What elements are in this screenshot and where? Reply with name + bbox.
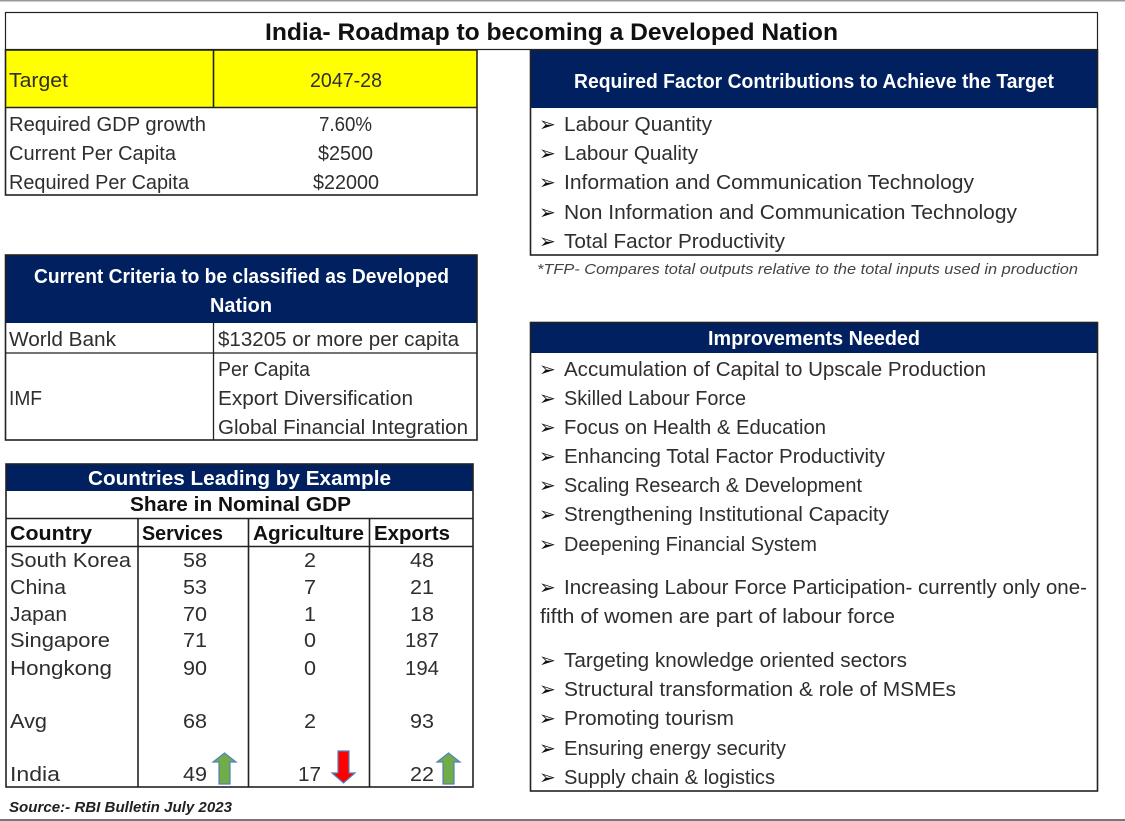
country data rows: 53 [183,577,207,599]
criteria rows: IMF [9,388,42,410]
country data rows: 49 [183,764,207,786]
improvements list: ➢ [539,415,556,439]
improvements list [539,357,1087,789]
criteria rows: Global Financial Integration [218,417,468,439]
icon: exports up arrow [437,753,460,784]
icon: agriculture down arrow [332,751,355,783]
criteria rows: $13205 or more per capita [218,329,460,351]
country data rows: Avg [10,711,47,733]
factor list: ➢ [539,141,556,165]
factor list: Labour Quantity [564,114,712,136]
country data rows: 1 [304,604,316,626]
improvements list: Ensuring energy security [564,738,786,760]
factor list: Labour Quality [564,143,698,165]
improvements list: fifth of women are part of labour force [540,606,895,628]
panel: improvements needed [530,322,1098,791]
country data rows: 70 [183,604,207,626]
criteria heading: Current Criteria to be classified as Developed [34,266,449,288]
improvements list: ➢ [539,736,556,760]
improvements list: ➢ [539,473,556,497]
improvements list: Increasing Labour Force Participation- currently only one- [564,577,1087,599]
factor heading: Required Factor Contributions to Achieve the Target [574,71,1054,93]
country data rows: 7 [304,577,316,599]
target metrics [9,114,379,194]
country data rows: 2 [304,711,316,733]
factor list: Information and Communication Technology [564,172,974,194]
panel: current criteria [6,255,477,440]
improvements list: ➢ [539,386,556,410]
improvements list: ➢ [539,706,556,730]
footnote: TFP definition: *TFP- Compares total outputs relative to the total inputs used in production [537,261,1078,278]
improvements list: Skilled Labour Force [564,388,746,410]
country data rows: China [10,577,67,599]
panel: countries leading by example [6,464,473,787]
factor list: ➢ [539,200,556,224]
improvements list: Accumulation of Capital to Upscale Production [564,359,986,381]
improvements list: Scaling Research & Development [564,475,862,497]
improvements list: ➢ [539,648,556,672]
target metrics: Current Per Capita [9,143,177,165]
improvements list: ➢ [539,765,556,789]
improvements list: ➢ [539,677,556,701]
target metrics: Required GDP growth [9,114,206,136]
country data rows: 18 [410,604,434,626]
target header row: Target [9,70,68,92]
improvements list: ➢ [539,502,556,526]
title [6,12,1098,50]
country data rows: 21 [410,577,434,599]
factor list: ➢ [539,229,556,253]
country data rows: 194 [405,658,439,680]
target header row: 2047-28 [310,70,382,92]
factor list: ➢ [539,170,556,194]
column headers: Country [10,523,93,545]
criteria rows: World Bank [9,329,117,351]
country data rows: 0 [304,658,316,680]
improvements heading: Improvements Needed [708,328,920,350]
criteria heading: Nation [210,295,272,317]
factor list: Total Factor Productivity [564,231,785,253]
country data rows: 0 [304,630,316,652]
criteria rows: Export Diversification [218,388,413,410]
criteria rows [9,329,468,439]
country data rows: South Korea [10,550,132,572]
country data rows: Japan [10,604,67,626]
country data rows: Hongkong [10,658,112,680]
improvements list: Deepening Financial System [564,534,817,556]
country data rows: 93 [410,711,434,733]
target metrics: $2500 [318,143,373,165]
countries heading: Countries Leading by Example [88,468,391,490]
title: India- Roadmap to becoming a Developed Nation [265,19,838,46]
target metrics: 7.60% [319,114,372,136]
improvements list: Focus on Health & Education [564,417,826,439]
column headers: Agriculture [253,523,364,545]
target metrics: $22000 [313,172,379,194]
column headers: Services [142,523,223,545]
country data rows: 22 [410,764,434,786]
country data rows: 71 [183,630,207,652]
column headers: Exports [374,523,450,545]
country data rows: India [10,764,61,786]
country data rows: 58 [183,550,207,572]
improvements list: Structural transformation & role of MSMEs [564,679,956,701]
icon: services up arrow [213,753,236,784]
improvements list: Targeting knowledge oriented sectors [564,650,907,672]
panel: target table [6,50,477,195]
source note: Source:- RBI Bulletin July 2023 [9,799,233,816]
improvements list: ➢ [539,444,556,468]
country data rows [10,550,439,786]
panel: required factor contributions [530,50,1098,255]
table subheading: Share in Nominal GDP [130,494,351,516]
factor list: Non Information and Communication Technology [564,202,1017,224]
criteria rows: Per Capita [218,359,311,381]
improvements list: Strengthening Institutional Capacity [564,504,889,526]
country data rows: 2 [304,550,316,572]
country data rows: 17 [298,764,321,786]
column headers [10,523,450,545]
country data rows: 187 [405,630,439,652]
factor list [539,112,1017,253]
improvements list: ➢ [539,357,556,381]
country data rows: 68 [183,711,207,733]
improvements list: Supply chain & logistics [564,767,775,789]
factor list: ➢ [539,112,556,136]
target metrics: Required Per Capita [9,172,190,194]
improvements list: ➢ [539,575,556,599]
improvements list: Promoting tourism [564,708,734,730]
country data rows: Singapore [10,630,110,652]
improvements list: ➢ [539,532,556,556]
country data rows: 90 [183,658,207,680]
criteria heading [34,266,449,317]
country data rows: 48 [410,550,434,572]
improvements list: Enhancing Total Factor Productivity [564,446,885,468]
target header row [6,50,477,107]
